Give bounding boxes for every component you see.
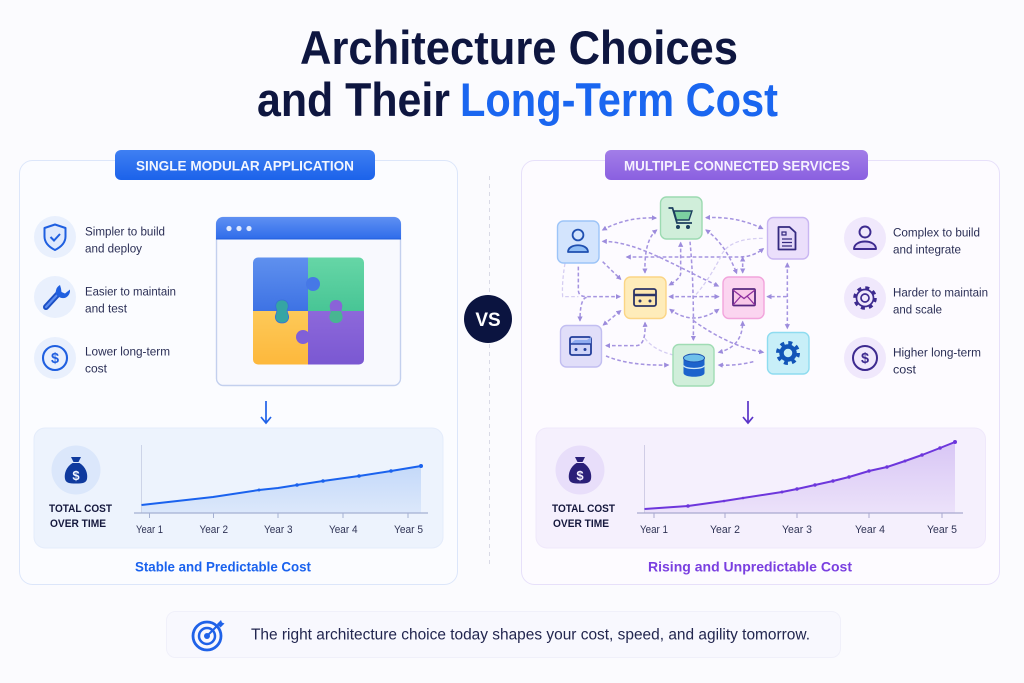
icon: money bag (52, 446, 100, 494)
title: Long-Term Cost (460, 73, 778, 126)
benefit: easier to maintain and test (34, 276, 176, 318)
arrow: window to chart (261, 401, 271, 423)
title: Architecture Choices (300, 21, 738, 74)
benefit: simpler to build and deploy (34, 216, 165, 258)
icon: target (193, 620, 224, 650)
benefit: lower long-term cost: $ (51, 351, 59, 367)
node: mail (723, 277, 764, 318)
label: total cost over time (49, 503, 112, 530)
benefit: lower long-term cost (34, 337, 170, 379)
text: takeaway: The right architecture choice today shapes your cost, speed, and agility tomorrow. (251, 626, 810, 644)
drawback: complex to build and integrate: Complex to build (893, 226, 980, 240)
drawback: harder to maintain and scale: Harder to maintain (893, 286, 988, 300)
callout: takeaway (166, 612, 840, 658)
chart: stable cost line: Year 3 (264, 524, 292, 536)
panel: multiple connected services (522, 150, 1000, 584)
label: total cost over time (552, 503, 615, 530)
chart: stable cost line: Year 1 (136, 524, 163, 536)
drawback: higher long-term cost: Higher long-term (893, 346, 981, 360)
chart: rising cost curve: Year 3 (782, 524, 812, 536)
panel: single modular application (20, 150, 458, 584)
dashed connections (562, 217, 787, 365)
chart: stable cost line: Year 4 (329, 524, 358, 536)
node: document (768, 218, 808, 259)
node: gear (768, 332, 809, 374)
drawback: complex to build and integrate (844, 217, 980, 259)
drawback: harder to maintain and scale: and scale (893, 302, 942, 316)
caption: stable and predictable cost: Stable and Predictable Cost (135, 558, 311, 574)
drawback: higher long-term cost: cost (893, 362, 917, 376)
chart: stable cost line: Year 5 (394, 524, 423, 536)
benefit: simpler to build and deploy: Simpler to build (85, 224, 165, 238)
node: payment card (624, 277, 666, 318)
badge: multiple connected services: MULTIPLE CONNECTED SERVICES (624, 158, 850, 174)
chart: rising cost curve: Year 4 (855, 524, 885, 536)
chart: rising cost curve: Year 2 (710, 524, 740, 536)
chart: stable cost line (134, 445, 428, 536)
chart panel: rising cost (536, 428, 986, 548)
node: user (558, 221, 599, 263)
node: cart (660, 197, 702, 239)
arrow: network to chart (743, 401, 753, 423)
label: total cost over time: OVER TIME (553, 518, 609, 530)
icon: money bag (556, 446, 604, 494)
diagram: connected services network (558, 197, 809, 386)
benefit: easier to maintain and test: Easier to maintain (85, 284, 176, 298)
benefit: lower long-term cost: cost (85, 362, 108, 376)
chart: rising cost curve: Year 1 (640, 524, 668, 536)
benefit: easier to maintain and test: and test (85, 302, 128, 316)
label: total cost over time: TOTAL COST (49, 503, 112, 515)
drawback: complex to build and integrate: and integrate (893, 242, 961, 256)
node: wallet (560, 326, 602, 367)
label: total cost over time: TOTAL COST (552, 503, 615, 515)
benefit: lower long-term cost: Lower long-term (85, 344, 170, 358)
drawback: harder to maintain and scale (844, 277, 988, 319)
VS badge (464, 295, 512, 343)
chart: rising cost curve (637, 440, 963, 536)
chart: rising cost curve: Year 5 (927, 524, 957, 536)
drawback: higher long-term cost: $ (861, 351, 869, 367)
chart: stable cost line: Year 2 (200, 524, 228, 536)
title (257, 21, 778, 126)
caption: rising and unpredictable cost: Rising and Unpredictable Cost (648, 558, 852, 574)
divider: VS dashed line (488, 176, 490, 565)
VS badge: VS (475, 310, 501, 331)
illustration: app window with puzzle (216, 217, 401, 386)
badge: multiple connected services (605, 150, 868, 180)
label: total cost over time: OVER TIME (50, 518, 106, 530)
title: and Their (257, 73, 450, 126)
badge: single modular application: SINGLE MODULAR APPLICATION (136, 158, 354, 174)
node: database (673, 344, 714, 386)
benefit: simpler to build and deploy: and deploy (85, 242, 143, 256)
chart panel: stable cost (34, 428, 443, 548)
icon: money bag: $ (72, 468, 80, 483)
drawback: higher long-term cost (844, 337, 981, 379)
badge: single modular application (115, 150, 375, 180)
icon: money bag: $ (576, 468, 584, 483)
